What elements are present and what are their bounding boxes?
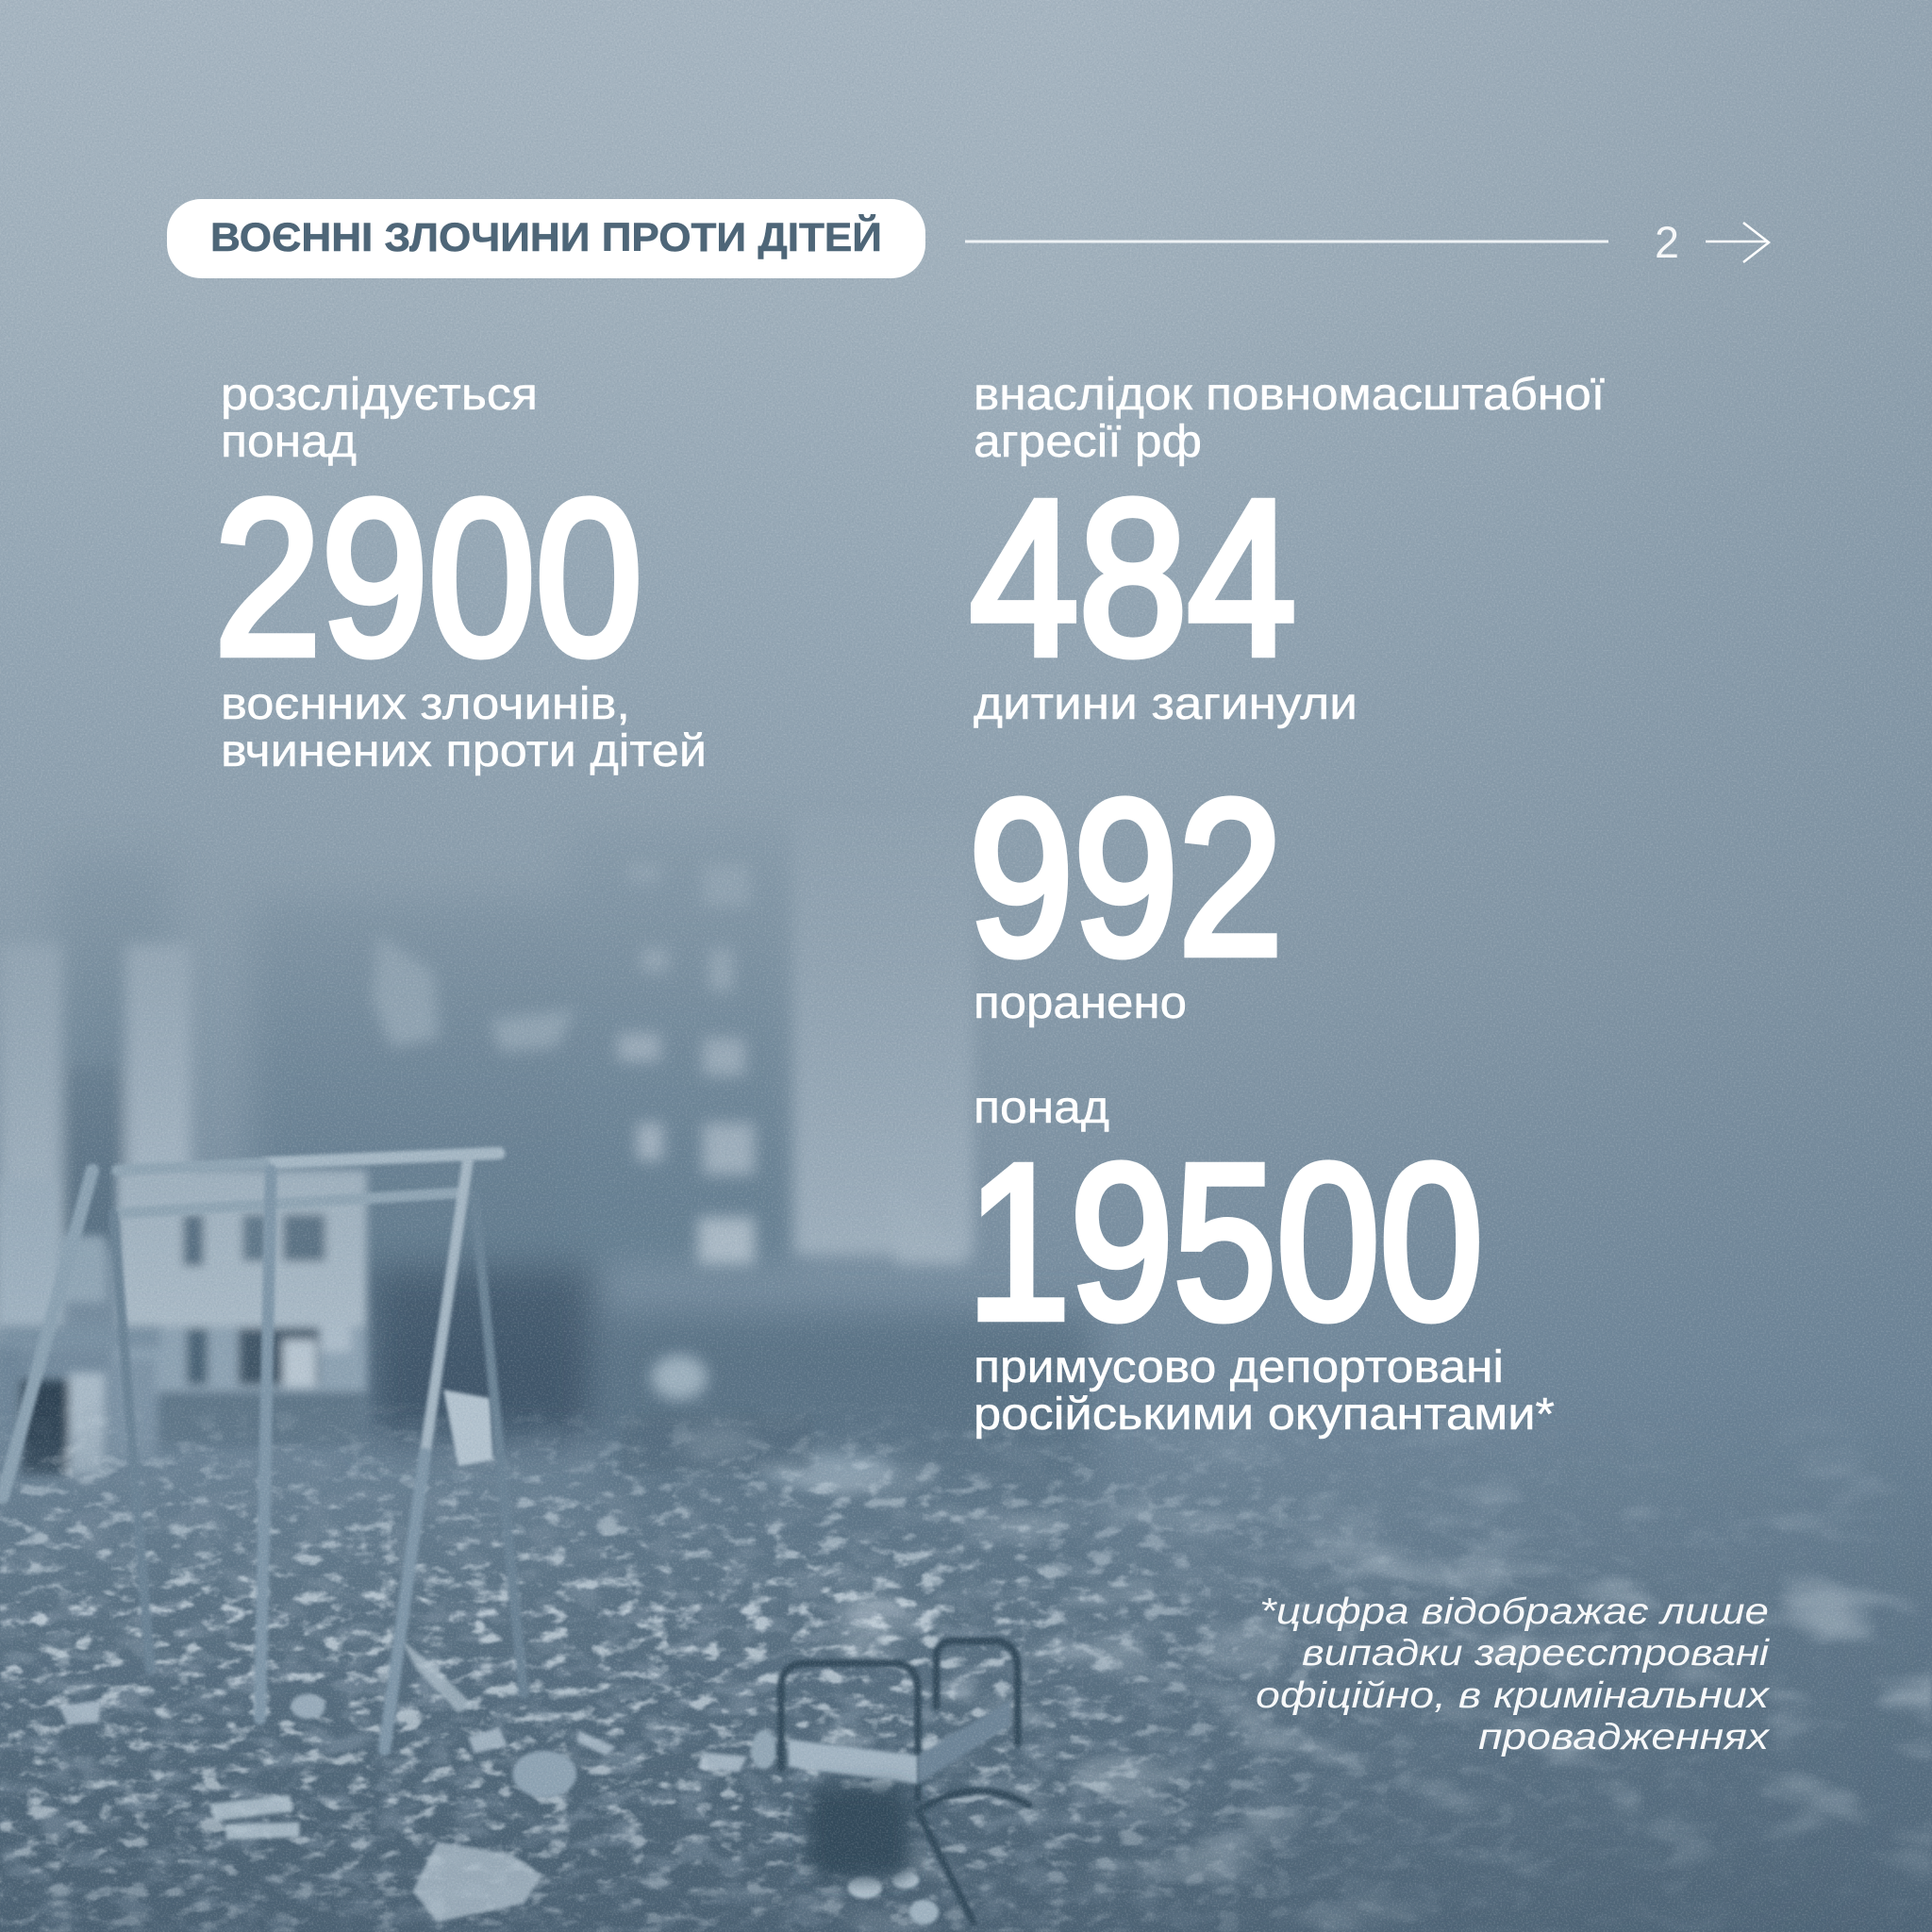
footnote: випадки зареєстровані — [1302, 1633, 1771, 1674]
footnote: провадженнях — [1478, 1717, 1771, 1757]
stat intro: full-scale aggression — [974, 370, 1605, 467]
stat intro: full-scale aggression: агресії рф — [974, 417, 1202, 467]
stat: 2900 war crimes: понад — [221, 417, 357, 467]
stat: 2900 war crimes: розслідується — [221, 370, 538, 420]
background photo: debris, swing frame and bed — [3, 1153, 1029, 1924]
background photo: blurred rubble on the right — [755, 1396, 1932, 1932]
stat: 19500 deported: 19500 — [967, 1118, 1483, 1365]
background photo: ruined buildings — [0, 871, 1106, 1511]
stat: 19500 deported: примусово депортовані — [974, 1342, 1504, 1392]
footnote — [1256, 1591, 1771, 1757]
heading pill — [167, 199, 925, 278]
stat: 2900 war crimes: воєнних злочинів, — [221, 679, 630, 729]
stat: 19500 deported: понад — [974, 1083, 1109, 1133]
stat: 2900 war crimes: вчинених проти дітей — [221, 726, 707, 776]
stat: 2900 war crimes — [214, 370, 707, 776]
stat: 992 wounded: поранено — [974, 978, 1187, 1028]
footnote: *цифра відображає лише — [1259, 1591, 1769, 1632]
stat intro: full-scale aggression: внаслідок повномасштабної — [974, 370, 1605, 420]
stat: 484 children killed: дитини загинули — [974, 679, 1357, 729]
background photo: rubble ground — [0, 1411, 1658, 1932]
stat: 2900 war crimes: 2900 — [214, 454, 642, 701]
stat: 484 children killed: 484 — [970, 454, 1296, 701]
header divider line — [965, 240, 1608, 243]
heading pill: ВОЄННІ ЗЛОЧИНИ ПРОТИ ДІТЕЙ — [210, 214, 882, 260]
stat: 19500 deported — [967, 1083, 1555, 1440]
stat: 19500 deported: російськими окупантами* — [974, 1390, 1555, 1440]
stat: 992 wounded: 992 — [969, 754, 1283, 1001]
icon: arrow — [1706, 223, 1769, 262]
footnote: офіційно, в кримінальних — [1256, 1675, 1771, 1716]
page number: 2 — [1655, 217, 1679, 267]
